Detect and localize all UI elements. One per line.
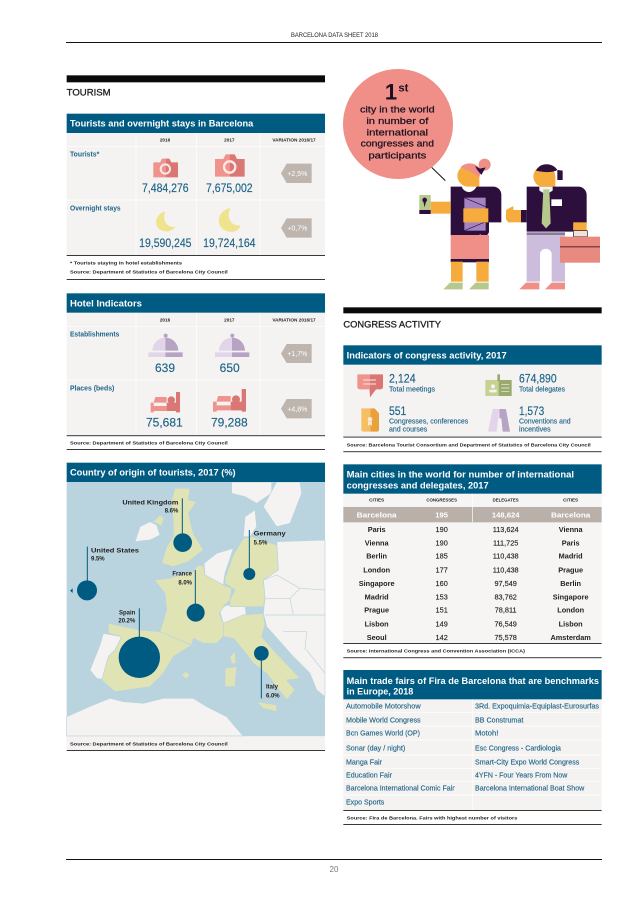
panel: main cities table: 153 bbox=[436, 593, 448, 602]
panel: main cities table: 142 bbox=[436, 633, 448, 642]
panel: main cities table: CITIES bbox=[563, 497, 578, 502]
panel: main cities table: 151 bbox=[436, 606, 448, 615]
panel: main cities table: 110,438 bbox=[493, 566, 519, 575]
panel: main cities table: 190 bbox=[436, 539, 448, 548]
icon: speech bubble bbox=[357, 374, 383, 397]
panel: main cities table: 78,811 bbox=[495, 606, 517, 615]
panel: main trade fairs: Smart-City Expo World Congress bbox=[475, 757, 580, 766]
section heading: tourism bbox=[67, 75, 325, 98]
panel: main cities table: Main cities in the world for number of international bbox=[347, 470, 574, 480]
panel: tourists and overnight stays: 19,590,245 bbox=[139, 236, 192, 250]
panel: indicators of congress activity: Indicators of congress activity, 2017 bbox=[347, 351, 507, 361]
callout: 1st city bubble: in number of bbox=[366, 116, 429, 126]
map labels: United States bbox=[91, 548, 140, 554]
panel: main trade fairs: Expo Sports bbox=[346, 797, 385, 806]
map labels: 20.2% bbox=[118, 618, 136, 624]
map labels: 8.0% bbox=[178, 580, 193, 586]
panel: main cities table: 149 bbox=[436, 620, 448, 629]
panel: main cities table: Amsterdam bbox=[551, 633, 591, 642]
icon: camera 2017 bbox=[215, 154, 245, 177]
map labels: France bbox=[172, 571, 193, 577]
panel: main cities table: Berlin bbox=[560, 579, 582, 588]
panel: main trade fairs: 4YFN - Four Years From Now bbox=[475, 770, 568, 779]
panel: main cities table: 160 bbox=[436, 579, 448, 588]
panel: tourists and overnight stays: 7,484,276 bbox=[142, 181, 189, 195]
panel: main cities table: Paris bbox=[562, 539, 580, 548]
panel: main cities table: Lisbon bbox=[559, 620, 583, 629]
map labels: 5.5% bbox=[254, 541, 268, 547]
panel: main cities table: London bbox=[363, 566, 391, 575]
panel: main cities table: Madrid bbox=[559, 552, 583, 561]
panel: main trade fairs: BB Construmat bbox=[475, 715, 523, 724]
panel: main cities table: Madrid bbox=[365, 593, 389, 602]
panel: main trade fairs: Barcelona International Comic Fair bbox=[346, 783, 455, 792]
panel: indicators of congress activity: Total meetings bbox=[389, 385, 435, 394]
panel: indicators of congress activity: Source: Barcelona Tourist Consortium and Department of Statistics of Barcelona City Council bbox=[347, 442, 591, 448]
callout: 1st city bubble: city in the world bbox=[360, 105, 435, 115]
panel: indicators of congress activity: 2,124 bbox=[389, 372, 416, 386]
panel: main cities table: Lisbon bbox=[365, 620, 389, 629]
panel: main trade fairs: Mobile World Congress bbox=[346, 715, 421, 724]
panel: main cities table: Prague bbox=[558, 566, 583, 575]
panel: indicators of congress activity: 551 bbox=[389, 404, 407, 418]
icon: curtain stage bbox=[488, 409, 510, 432]
callout: 1st city bubble: international bbox=[367, 128, 428, 138]
icon: moon 2017 bbox=[219, 208, 241, 232]
panel: main cities table: 75,578 bbox=[494, 633, 517, 642]
panel: main cities table: DELEGATES bbox=[493, 497, 519, 502]
panel: main cities table: Seoul bbox=[367, 633, 387, 642]
panel: main cities table: London bbox=[557, 606, 585, 615]
panel: indicators of congress activity: Congresses, conferences bbox=[389, 417, 469, 426]
panel: tourists and overnight stays: 19,724,164 bbox=[203, 236, 256, 250]
section heading: congress activity: CONGRESS ACTIVITY bbox=[343, 320, 441, 330]
panel: hotel indicators: 79,288 bbox=[211, 416, 248, 430]
section heading: tourism: TOURISM bbox=[67, 88, 111, 98]
panel: country of origin map: Source: Department of Statistics of Barcelona City Council bbox=[70, 741, 228, 747]
callout: 1st city bubble: st bbox=[398, 83, 409, 95]
icon: cloche 2016 bbox=[148, 334, 183, 357]
panel: hotel indicators: Places (beds) bbox=[70, 383, 115, 392]
panel: hotel indicators: Source: Department of Statistics of Barcelona City Council bbox=[70, 440, 228, 446]
panel: tourists and overnight stays: Overnight stays bbox=[70, 204, 121, 213]
highlighted row: Barcelona: Barcelona bbox=[357, 511, 397, 520]
panel: tourists and overnight stays: Source: Department of Statistics of Barcelona City Council bbox=[70, 270, 228, 276]
highlighted row: Barcelona bbox=[343, 494, 602, 522]
panel: hotel indicators: VARIATION 2016/17 bbox=[272, 318, 316, 323]
panel: hotel indicators: 75,681 bbox=[146, 416, 183, 430]
panel: main cities table: 113,624 bbox=[493, 525, 519, 534]
panel: tourists and overnight stays: VARIATION 2016/17 bbox=[272, 138, 316, 143]
panel: main trade fairs: Esc Congress - Cardiologia bbox=[475, 744, 562, 753]
panel: hotel indicators bbox=[67, 293, 325, 450]
variation tag: establishments bbox=[281, 344, 312, 363]
map labels: Italy bbox=[266, 685, 279, 691]
panel: tourists and overnight stays: Tourists* bbox=[70, 150, 99, 159]
icon: camera 2016 bbox=[153, 159, 178, 177]
panel: main cities table: 111,725 bbox=[493, 539, 518, 548]
panel: indicators of congress activity: and courses bbox=[389, 425, 428, 434]
map markers bbox=[70, 498, 269, 698]
panel: indicators of congress activity: Total delegates bbox=[519, 385, 565, 394]
panel: hotel indicators: 639 bbox=[155, 361, 175, 375]
panel: indicators of congress activity: incentives bbox=[519, 425, 551, 434]
panel: main cities table: CITIES bbox=[369, 497, 384, 502]
highlighted row: Barcelona: 195 bbox=[435, 511, 449, 520]
map labels: Germany bbox=[254, 532, 286, 538]
panel: country of origin map bbox=[67, 463, 325, 751]
panel: main trade fairs: in Europe, 2018 bbox=[347, 686, 413, 696]
callout: 1st city bubble bbox=[343, 69, 453, 181]
panel: main trade fairs: Main trade fairs of Fira de Barcelona that are benchmarks bbox=[347, 676, 599, 686]
icon: document bbox=[361, 408, 379, 432]
panel: main cities table: Paris bbox=[368, 525, 386, 534]
variation tag: overnight stays bbox=[281, 218, 312, 238]
panel: main trade fairs: Barcelona International Boat Show bbox=[475, 783, 585, 792]
panel: tourists and overnight stays: 7,675,002 bbox=[206, 181, 253, 195]
icon: bed 2017 bbox=[213, 389, 246, 412]
map labels: United Kingdom bbox=[122, 501, 178, 507]
panel: main trade fairs: Source: Fira de Barcelona. Fairs with highest number of visitors bbox=[347, 816, 518, 822]
panel: main cities table: 83,762 bbox=[494, 593, 517, 602]
panel: main cities table: 190 bbox=[436, 525, 448, 534]
panel: main cities table: Source: International Congress and Convention Association (ICCA) bbox=[347, 649, 525, 655]
panel: main trade fairs: Bcn Games World (OP) bbox=[346, 728, 420, 737]
callout: 1st city bubble: participants bbox=[368, 151, 427, 161]
panel: main cities table: CONGRESSES bbox=[426, 497, 457, 502]
map labels: Spain bbox=[119, 610, 136, 616]
map land bbox=[67, 482, 325, 736]
panel: main trade fairs bbox=[343, 670, 602, 825]
panel: main cities table: 177 bbox=[436, 566, 448, 575]
icon: delegate badge bbox=[485, 374, 512, 396]
panel: hotel indicators: 650 bbox=[220, 361, 240, 375]
panel: main cities table: Singapore bbox=[359, 579, 395, 588]
panel: hotel indicators: Establishments bbox=[70, 329, 119, 338]
page header: BARCELONA DATA SHEET 2018 bbox=[291, 32, 378, 39]
panel: tourists and overnight stays bbox=[67, 114, 325, 280]
panel: main cities table: Vienna bbox=[365, 539, 390, 548]
panel: main cities table: Singapore bbox=[553, 593, 589, 602]
variation tag: establishments: +1,7% bbox=[287, 351, 307, 358]
page footer: 20 bbox=[330, 865, 339, 874]
panel: main trade fairs: Automobile Motorshow bbox=[346, 701, 421, 710]
variation tag: tourists: +2,5% bbox=[287, 171, 307, 178]
variation tag: places bbox=[281, 399, 312, 418]
highlighted row: Barcelona: 148,624 bbox=[492, 511, 520, 520]
panel: tourists and overnight stays: * Tourists staying in hotel establishments bbox=[70, 261, 182, 267]
panel: indicators of congress activity: 1,573 bbox=[519, 404, 545, 418]
illustration: woman with phone bbox=[419, 159, 501, 289]
icon: bed 2016 bbox=[151, 392, 180, 412]
panel: indicators of congress activity: 674,890 bbox=[519, 372, 557, 386]
panel: indicators of congress activity: Conventions and bbox=[519, 417, 571, 426]
panel: main cities table: Prague bbox=[364, 606, 389, 615]
map labels: 9.5% bbox=[91, 556, 105, 562]
panel: tourists and overnight stays: 2017 bbox=[224, 138, 235, 143]
panel: main trade fairs: 3Rd. Expoquimia-Equiplast-Eurosurfas bbox=[475, 701, 599, 710]
callout: 1st city bubble: congresses and bbox=[361, 139, 434, 149]
panel: indicators of congress activity bbox=[343, 345, 602, 452]
panel: main cities table: Berlin bbox=[366, 552, 388, 561]
panel: main trade fairs: Manga Fair bbox=[346, 757, 383, 766]
section heading: congress activity bbox=[343, 307, 602, 330]
icon: cloche 2017 bbox=[215, 334, 249, 357]
variation tag: places: +4,8% bbox=[287, 406, 307, 413]
panel: hotel indicators: 2016 bbox=[160, 318, 171, 323]
callout: 1st city bubble: 1 bbox=[385, 79, 397, 104]
highlighted row: Barcelona: Barcelona bbox=[551, 511, 591, 520]
illustration: man with briefcase bbox=[506, 164, 600, 289]
panel: main trade fairs: Sonar (day / night) bbox=[346, 744, 405, 753]
panel: main cities table: 185 bbox=[436, 552, 448, 561]
panel: main cities table: 110,438 bbox=[493, 552, 519, 561]
panel: main cities table bbox=[343, 464, 602, 658]
map labels: 8.6% bbox=[165, 508, 179, 514]
variation tag: tourists bbox=[281, 164, 312, 183]
map labels: 6.0% bbox=[266, 693, 280, 699]
variation tag: overnight stays: +0,7% bbox=[287, 226, 307, 233]
icon: moon 2016 bbox=[156, 211, 175, 231]
panel: main cities table: 76,549 bbox=[494, 620, 517, 629]
panel: main cities table: congresses and delegates, 2017 bbox=[347, 480, 489, 490]
panel: hotel indicators: Hotel Indicators bbox=[70, 299, 142, 309]
panel: hotel indicators: 2017 bbox=[224, 318, 235, 323]
panel: main cities table: 97,549 bbox=[494, 579, 517, 588]
panel: main trade fairs: Education Fair bbox=[346, 770, 393, 779]
panel: main trade fairs: Motoh! bbox=[475, 728, 498, 737]
panel: tourists and overnight stays: Tourists and overnight stays in Barcelona bbox=[70, 119, 254, 129]
panel: country of origin map: Country of origin of tourists, 2017 (%) bbox=[70, 467, 236, 477]
panel: main cities table: Vienna bbox=[559, 525, 584, 534]
panel: tourists and overnight stays: 2016 bbox=[160, 138, 171, 143]
map labels bbox=[91, 501, 286, 699]
